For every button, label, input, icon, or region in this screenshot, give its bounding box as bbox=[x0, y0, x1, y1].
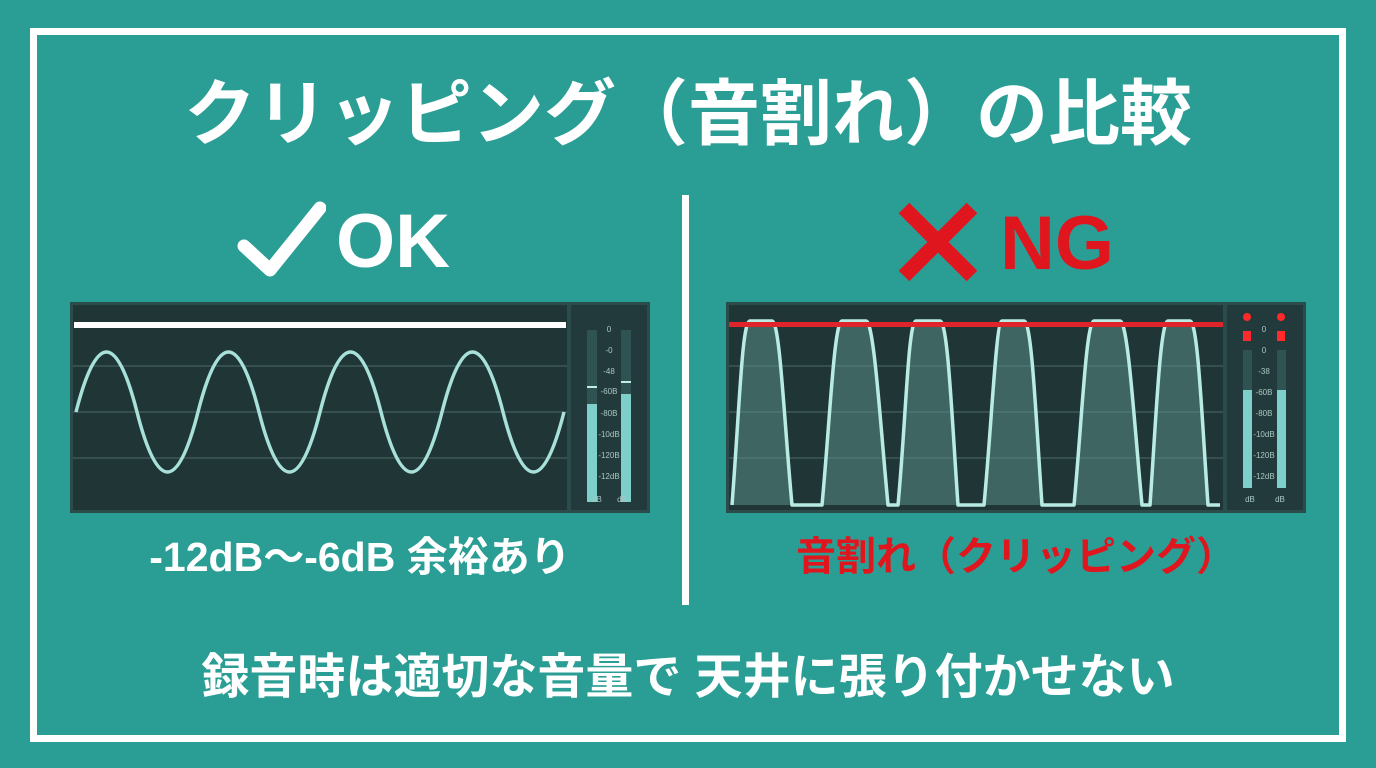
panel: NG waveform: 0 bbox=[1262, 346, 1267, 355]
panel: OK waveform: -80B bbox=[601, 409, 617, 418]
panel: OK waveform: -12dB bbox=[598, 472, 620, 481]
caption: NG: 音割れ（クリッピング） bbox=[796, 535, 1236, 579]
panel: NG waveform: -12dB bbox=[1253, 472, 1275, 481]
heading: NG bbox=[898, 201, 1114, 286]
panel: NG waveform: dB bbox=[1275, 495, 1285, 504]
panel: NG waveform: -80B bbox=[1256, 409, 1272, 418]
panel: OK waveform: dB bbox=[617, 495, 627, 504]
panel: NG waveform: 0 bbox=[1262, 325, 1267, 334]
heading: NG: NG bbox=[1000, 201, 1114, 286]
heading: OK: OK bbox=[336, 199, 450, 284]
panel: OK waveform: -60B bbox=[601, 387, 617, 396]
panel: OK waveform: -48 bbox=[603, 367, 615, 376]
panel: NG waveform: -120B bbox=[1253, 451, 1275, 460]
icon: cross bbox=[898, 202, 978, 282]
heading: OK bbox=[238, 199, 450, 284]
panel: OK waveform bbox=[70, 302, 650, 513]
panel: NG waveform: dB bbox=[1245, 495, 1255, 504]
panel: OK waveform: -120B bbox=[598, 451, 620, 460]
bottom message: 録音時は適切な音量で 天井に張り付かせない bbox=[201, 651, 1175, 704]
divider bbox=[682, 195, 689, 605]
panel: NG waveform bbox=[726, 302, 1306, 513]
caption: OK: -12dB〜-6dB 余裕あり bbox=[149, 534, 571, 580]
title: クリッピング（音割れ）の比較 bbox=[184, 75, 1192, 155]
panel: NG waveform: -38 bbox=[1258, 367, 1270, 376]
panel: OK waveform: -10dB bbox=[598, 430, 620, 439]
panel: OK waveform: -0 bbox=[605, 346, 613, 355]
panel: NG waveform: -10dB bbox=[1253, 430, 1275, 439]
icon: check bbox=[238, 202, 326, 276]
panel: OK waveform: 0 bbox=[607, 325, 612, 334]
panel: NG waveform: -60B bbox=[1256, 388, 1272, 397]
panel: OK waveform: dB bbox=[592, 495, 602, 504]
